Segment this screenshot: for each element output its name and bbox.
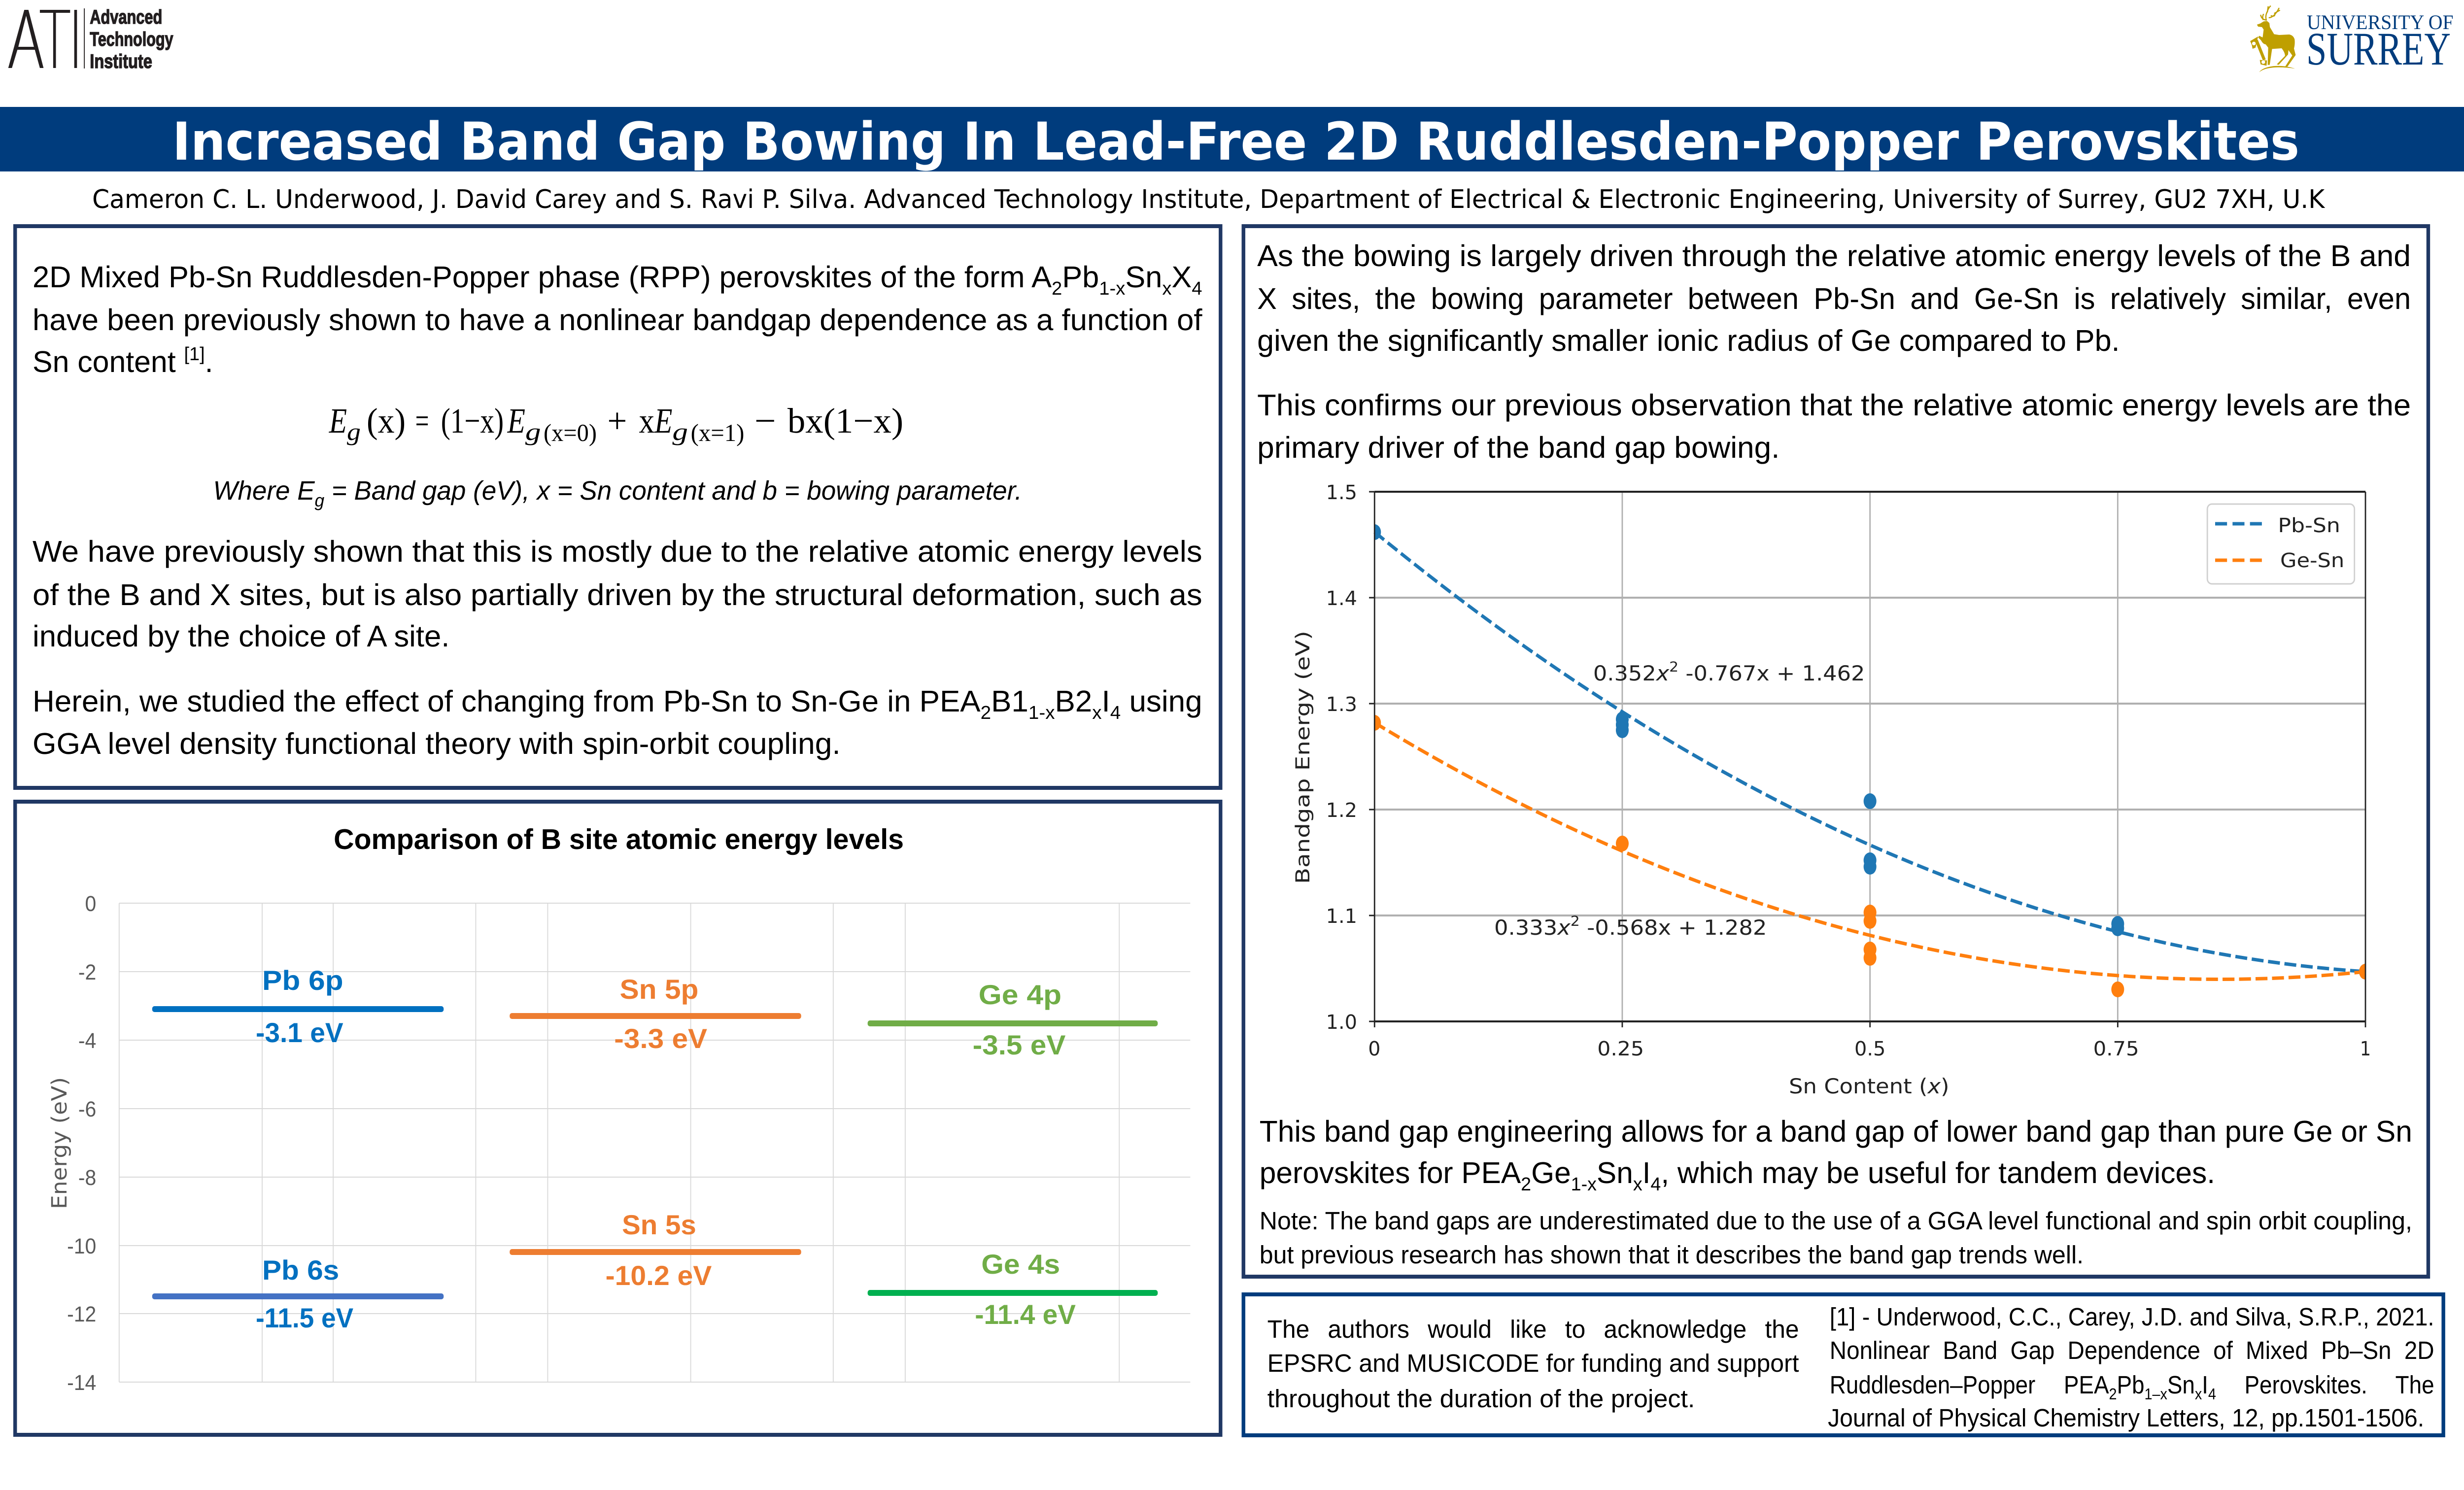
text block: RPP background: x	[1162, 278, 1171, 299]
acknowledgements: throughout the duration of the project.	[1267, 1385, 1695, 1413]
reference: 1–x	[2144, 1385, 2167, 1403]
reference	[1828, 1303, 2434, 1432]
reference: x	[2195, 1385, 2202, 1403]
text block: bowing discussion: given the significantly smaller ionic radius of Ge compared to Pb.	[1257, 324, 2120, 357]
reference: Ruddlesden–Popper PEA	[1830, 1371, 2119, 1399]
text block: RPP background: 1-x	[1099, 278, 1125, 299]
text block: RPP background	[33, 260, 1203, 378]
level: Pb 6p	[152, 965, 444, 1048]
legend: Ge-Sn	[2280, 549, 2344, 572]
level: Pb 6s: Pb 6s	[262, 1254, 339, 1286]
annotation: Ge-Sn fit equation: 2	[1571, 913, 1580, 929]
panel: acknowledgements and reference	[1243, 1294, 2443, 1435]
data points: Pb-Sn	[1368, 524, 2372, 980]
logo: Advanced Technology Institute: Technology	[90, 29, 173, 50]
y axis tick labels: -6	[78, 1097, 96, 1121]
text block: this study: B1	[991, 684, 1028, 718]
text block: this study: 2	[981, 703, 991, 723]
panel: introduction	[15, 226, 1221, 788]
text block: previous findings: induced by the choice of A site.	[33, 619, 449, 653]
text block: confirmation: primary driver of the band gap bowing.	[1257, 431, 1780, 464]
level: Ge 4s: -11.4 eV	[975, 1299, 1076, 1330]
panel: atomic energy level chart	[15, 802, 1221, 1435]
text block: this study: B2	[1055, 684, 1092, 718]
text block: RPP background: [1]	[184, 344, 205, 365]
text block: band gap engineering: 4	[1650, 1174, 1661, 1195]
y axis tick labels: 0	[85, 892, 96, 916]
y tick labels: 1.2	[1326, 799, 1357, 822]
data points: Ge-Sn	[1368, 715, 2372, 997]
text block: this study: 4	[1110, 703, 1121, 723]
equation: bowing: (x)	[367, 401, 406, 440]
logo: University of Surrey: UNIVERSITY OF	[2307, 11, 2454, 34]
text block: RPP background: Sn	[1125, 260, 1162, 294]
text block: RPP background: have been previously shown to have a nonlinear bandgap dependence as a function of	[33, 303, 1203, 337]
level: Pb 6s	[152, 1254, 444, 1333]
reference: Sn	[2167, 1371, 2195, 1399]
acknowledgements	[1267, 1315, 1799, 1413]
logo: University of Surrey	[2250, 6, 2454, 75]
y axis tick labels: -12	[67, 1302, 96, 1326]
level: Ge 4p: -3.5 eV	[973, 1029, 1065, 1060]
level: Pb 6p: Pb 6p	[262, 965, 343, 996]
text block: this study: GGA level density functional theory with spin-orbit coupling.	[33, 727, 841, 760]
text block: previous findings	[33, 535, 1202, 653]
logo: Advanced Technology Institute: Advanced	[90, 6, 162, 28]
annotation: Ge-Sn fit equation: -0.568x + 1.282	[1580, 915, 1767, 940]
text block: band gap engineering: Sn	[1597, 1156, 1633, 1189]
level: Sn 5p: Sn 5p	[619, 974, 698, 1005]
reference: 2	[2109, 1385, 2117, 1403]
y axis tick labels: -10	[67, 1234, 96, 1258]
y tick labels	[1326, 481, 1357, 1034]
equation legend: = Band gap (eV), x = Sn content and b = bowing parameter.	[324, 476, 1022, 506]
equation: bowing: g	[525, 418, 541, 445]
equation: bowing: −	[754, 401, 776, 440]
text block: confirmation: This confirms our previous observation that the relative atomic energy levels are the	[1257, 388, 2411, 422]
text block: this study: x	[1092, 703, 1102, 723]
reference: Perovskites. The	[2216, 1371, 2434, 1399]
annotation: Pb-Sn fit equation: 0.352 x	[1593, 661, 1668, 685]
acknowledgements: EPSRC and MUSICODE for funding and support	[1267, 1349, 1799, 1377]
level: Ge 4p: Ge 4p	[979, 979, 1061, 1010]
level: Sn 5p: -3.3 eV	[614, 1023, 707, 1054]
level: Sn 5s: -10.2 eV	[606, 1260, 712, 1291]
logo: Advanced Technology Institute: Institute	[90, 51, 152, 72]
annotation: Pb-Sn fit equation: 2	[1669, 659, 1678, 675]
level: Ge 4p	[868, 979, 1158, 1060]
reference: Pb	[2117, 1371, 2144, 1399]
y tick labels: 1.3	[1326, 693, 1357, 716]
annotation: Pb-Sn fit equation: -0.767x + 1.462	[1678, 661, 1865, 685]
text block: band gap engineering: x	[1633, 1174, 1643, 1195]
x axis title: Sn Content ( x)	[1789, 1074, 1950, 1098]
title banner: Increased Band Gap Bowing In Lead-Free 2D Ruddlesden-Popper Perovskites	[172, 111, 2299, 172]
y axis tick labels: -14	[67, 1371, 96, 1395]
reference: Journal of Physical Chemistry Letters, 12, pp.1501-1506.	[1828, 1404, 2424, 1432]
text block: this study: Herein, we studied the effect of changing from Pb-Sn to Sn-Ge in PEA	[33, 684, 901, 718]
legend: Pb-Sn	[2278, 514, 2340, 537]
equation: bowing: E	[654, 401, 672, 440]
reference: 4	[2208, 1385, 2216, 1403]
text block: bowing discussion	[1257, 239, 2411, 357]
text block: RPP background: 2D Mixed Pb-Sn Ruddlesden-Popper phase (RPP) perovskites of the form A	[33, 260, 976, 294]
curve: Ge-Sn fit	[1374, 723, 2365, 979]
equation: bowing: E	[329, 401, 347, 440]
logo: Advanced Technology Institute	[8, 6, 173, 72]
equation: bowing: bx(1−x)	[787, 401, 903, 440]
equation legend: Where E	[213, 476, 309, 506]
y tick labels: 1.0	[1326, 1011, 1357, 1034]
text block: RPP background: Sn content	[33, 345, 166, 378]
x tick labels	[1368, 1038, 2371, 1060]
level: Sn 5s: Sn 5s	[622, 1209, 696, 1240]
equation legend: g	[315, 490, 324, 510]
text block: this study: using	[1121, 684, 1202, 718]
text block: RPP background: X	[1171, 260, 1192, 294]
level: Ge 4s	[868, 1249, 1158, 1330]
panel: bowing results	[1243, 226, 2428, 1277]
text block: band gap engineering: 1-x	[1571, 1174, 1597, 1195]
equation: bowing: g	[672, 418, 688, 445]
note	[1260, 1207, 2412, 1269]
y axis tick labels: -2	[78, 960, 96, 984]
authors and affiliation: Cameron C. L. Underwood, J. David Carey and S. Ravi P. Silva. Advanced Technology Institute, Department of Electrical & Electronic Engineering, University of Surrey, GU2 7XH, U.K	[92, 185, 2326, 214]
text block: band gap engineering: This band gap engineering allows for a band gap of lower band gap than pure Ge or Sn	[1260, 1115, 2412, 1148]
equation: bowing: E	[507, 401, 525, 440]
equation: bowing	[329, 401, 903, 446]
y tick labels: 1.5	[1326, 481, 1357, 504]
text block: band gap engineering: Ge	[1531, 1156, 1571, 1189]
annotation: Ge-Sn fit equation: 0.333 x	[1494, 915, 1569, 940]
y axis tick labels: -4	[78, 1029, 96, 1053]
y axis title: Energy (eV)	[47, 1077, 71, 1209]
note: but previous research has shown that it describes the band gap trends well.	[1260, 1241, 2084, 1269]
text block: RPP background: 2	[1052, 278, 1062, 299]
x tick labels: 0.25	[1597, 1038, 1644, 1060]
x tick labels: 0.75	[2093, 1038, 2139, 1060]
legend	[2207, 504, 2355, 584]
line chart: bandgap vs Sn content	[1292, 481, 2372, 1098]
x tick labels: 0.5	[1854, 1038, 1885, 1060]
note: Note: The band gaps are underestimated due to the use of a GGA level functional and spin orbit coupling,	[1260, 1207, 2412, 1235]
text block: band gap engineering: perovskites for PEA	[1260, 1156, 1505, 1189]
text block: band gap engineering: 2	[1521, 1174, 1531, 1195]
equation: bowing: (x=0)	[544, 419, 597, 446]
text block: band gap engineering: I	[1643, 1156, 1650, 1189]
reference: I	[2202, 1371, 2208, 1399]
text block: this study	[33, 684, 1202, 760]
text block: band gap engineering: , which may be useful for tandem devices.	[1661, 1156, 2215, 1189]
text block: confirmation	[1257, 388, 2411, 464]
acknowledgements: The authors would like to acknowledge the	[1267, 1315, 1799, 1343]
y axis tick labels	[67, 892, 96, 1395]
y axis tick labels: -8	[78, 1166, 96, 1190]
level: Ge 4s: Ge 4s	[981, 1249, 1060, 1280]
level: Sn 5p	[510, 974, 801, 1054]
x tick labels: 1	[2360, 1038, 2371, 1060]
reference: [1] - Underwood, C.C., Carey, J.D. and Silva, S.R.P., 2021.	[1830, 1303, 2434, 1331]
text block: RPP background: .	[205, 345, 213, 378]
equation: bowing: g	[347, 418, 361, 445]
text block: RPP background: Pb	[1062, 260, 1099, 294]
equation: bowing: +	[607, 401, 627, 440]
text block: previous findings: of the B and X sites, but is also partially driven by the structural deformation, such as	[33, 578, 1202, 611]
icon: stag with key	[2250, 6, 2295, 72]
chart heading: Comparison of B site atomic energy levels	[334, 823, 904, 855]
reference: Nonlinear Band Gap Dependence of Mixed Pb–Sn 2D	[1830, 1336, 2434, 1364]
text block: previous findings: We have previously shown that this is mostly due to the relative atomic energy levels	[33, 535, 1202, 568]
equation: bowing: x	[639, 401, 654, 440]
level: Pb 6s: -11.5 eV	[256, 1302, 353, 1333]
y axis title: Bandgap Energy (eV)	[1292, 631, 1314, 884]
text block: RPP background: 4	[1192, 278, 1202, 299]
text block: bowing discussion: X sites, the bowing parameter between Pb-Sn and Ge-Sn is relatively similar, even	[1257, 282, 2411, 315]
level: Sn 5s	[510, 1209, 801, 1291]
y tick labels: 1.1	[1326, 905, 1357, 928]
text block: band gap engineering	[1260, 1115, 2412, 1195]
equation: bowing: =	[415, 401, 429, 440]
text block: this study: 1-x	[1028, 703, 1055, 723]
equation: bowing: (1−x)	[441, 401, 504, 440]
curve: Pb-Sn fit	[1374, 532, 2365, 972]
level: Pb 6p: -3.1 eV	[256, 1017, 343, 1048]
y tick labels: 1.4	[1326, 587, 1357, 610]
text block: this study: I	[1102, 684, 1110, 718]
text block: bowing discussion: As the bowing is largely driven through the relative atomic energy levels of the B and	[1257, 239, 2411, 272]
equation: bowing: (x=1)	[691, 419, 744, 446]
x tick labels: 0	[1368, 1038, 1380, 1060]
